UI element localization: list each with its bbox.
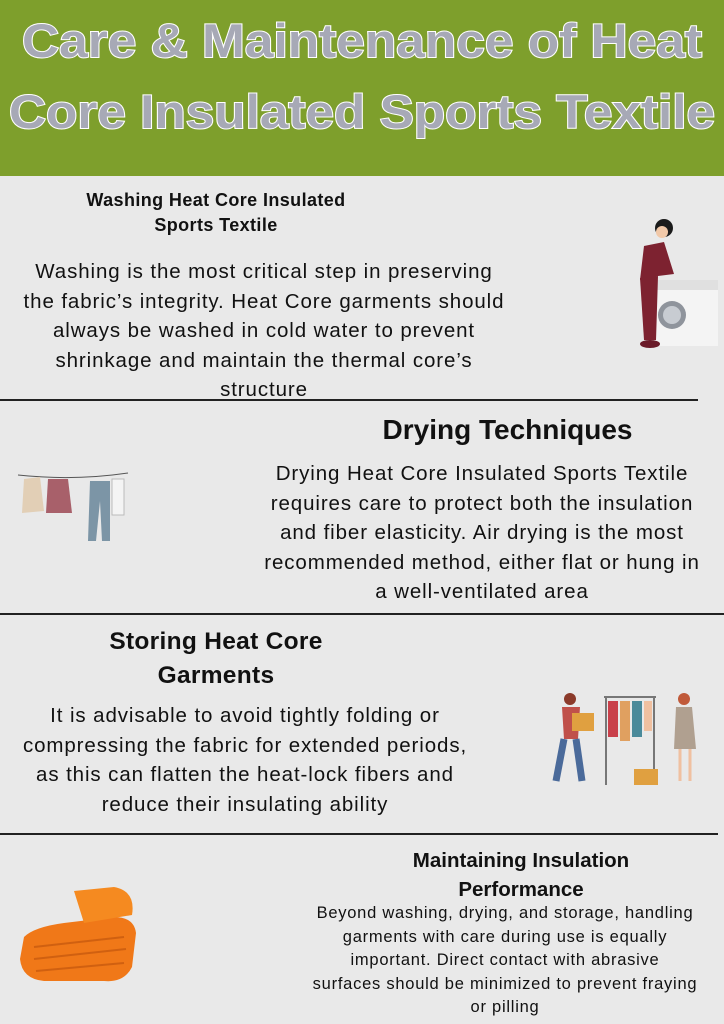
- icon: clothesline: [18, 472, 128, 541]
- heading: maintaining: Performance: [458, 878, 584, 901]
- panel: maintaining insulation: [20, 849, 697, 1016]
- text: drying: requires care to protect both the insulation: [271, 492, 693, 514]
- heading: washing: [86, 190, 346, 235]
- text: washing: [24, 260, 504, 401]
- text: washing: always be washed in cold water to prevent: [53, 319, 475, 342]
- text: washing: structure: [220, 378, 308, 401]
- text: storing: [23, 704, 467, 816]
- text: maintaining: or pilling: [471, 998, 539, 1016]
- text: maintaining: Beyond washing, drying, and storage, handling: [317, 904, 693, 922]
- title banner: [0, 0, 724, 176]
- heading: maintaining: [413, 849, 629, 901]
- heading: washing: Sports Textile: [154, 215, 278, 235]
- text: drying: recommended method, either flat or hung in: [264, 550, 700, 574]
- panel: washing: [24, 190, 718, 401]
- text: drying: and fiber elasticity. Air drying is the most: [280, 521, 684, 544]
- text: drying: a well-ventilated area: [375, 580, 589, 603]
- heading: storing: Garments: [158, 662, 274, 689]
- title: Core Insulated Sports Textile: [9, 85, 715, 138]
- text: maintaining: [313, 904, 697, 1016]
- text: washing: Washing is the most critical step in preserving: [35, 260, 493, 283]
- text: storing: compressing the fabric for extended periods,: [23, 734, 467, 756]
- icon: clothes rack with people: [552, 693, 696, 785]
- text: washing: the fabric’s integrity. Heat Core garments should: [24, 290, 504, 312]
- panel: storing: [23, 628, 696, 816]
- title: [9, 14, 715, 138]
- text: maintaining: surfaces should be minimized to prevent fraying: [313, 974, 697, 992]
- heading: maintaining: Maintaining Insulation: [413, 849, 629, 872]
- icon: orange folded socks: [20, 887, 136, 982]
- heading: storing: Storing Heat Core: [109, 628, 323, 655]
- text: maintaining: important. Direct contact with abrasive: [351, 951, 659, 969]
- heading: storing: [109, 628, 323, 689]
- heading: drying: Drying Techniques: [383, 414, 632, 445]
- icon: woman with washing machine: [640, 219, 718, 348]
- text: drying: [264, 462, 700, 603]
- text: storing: reduce their insulating ability: [102, 792, 388, 816]
- text: drying: Drying Heat Core Insulated Sports Textile: [276, 462, 688, 485]
- text: storing: as this can flatten the heat-lock fibers and: [36, 763, 454, 786]
- title: Care & Maintenance of Heat: [22, 14, 702, 67]
- heading: washing: Washing Heat Core Insulated: [86, 190, 346, 210]
- panel: drying: [18, 414, 700, 603]
- text: maintaining: garments with care during use is equally: [343, 928, 667, 946]
- text: storing: It is advisable to avoid tightly folding or: [50, 704, 440, 727]
- text: washing: shrinkage and maintain the thermal core’s: [55, 348, 473, 372]
